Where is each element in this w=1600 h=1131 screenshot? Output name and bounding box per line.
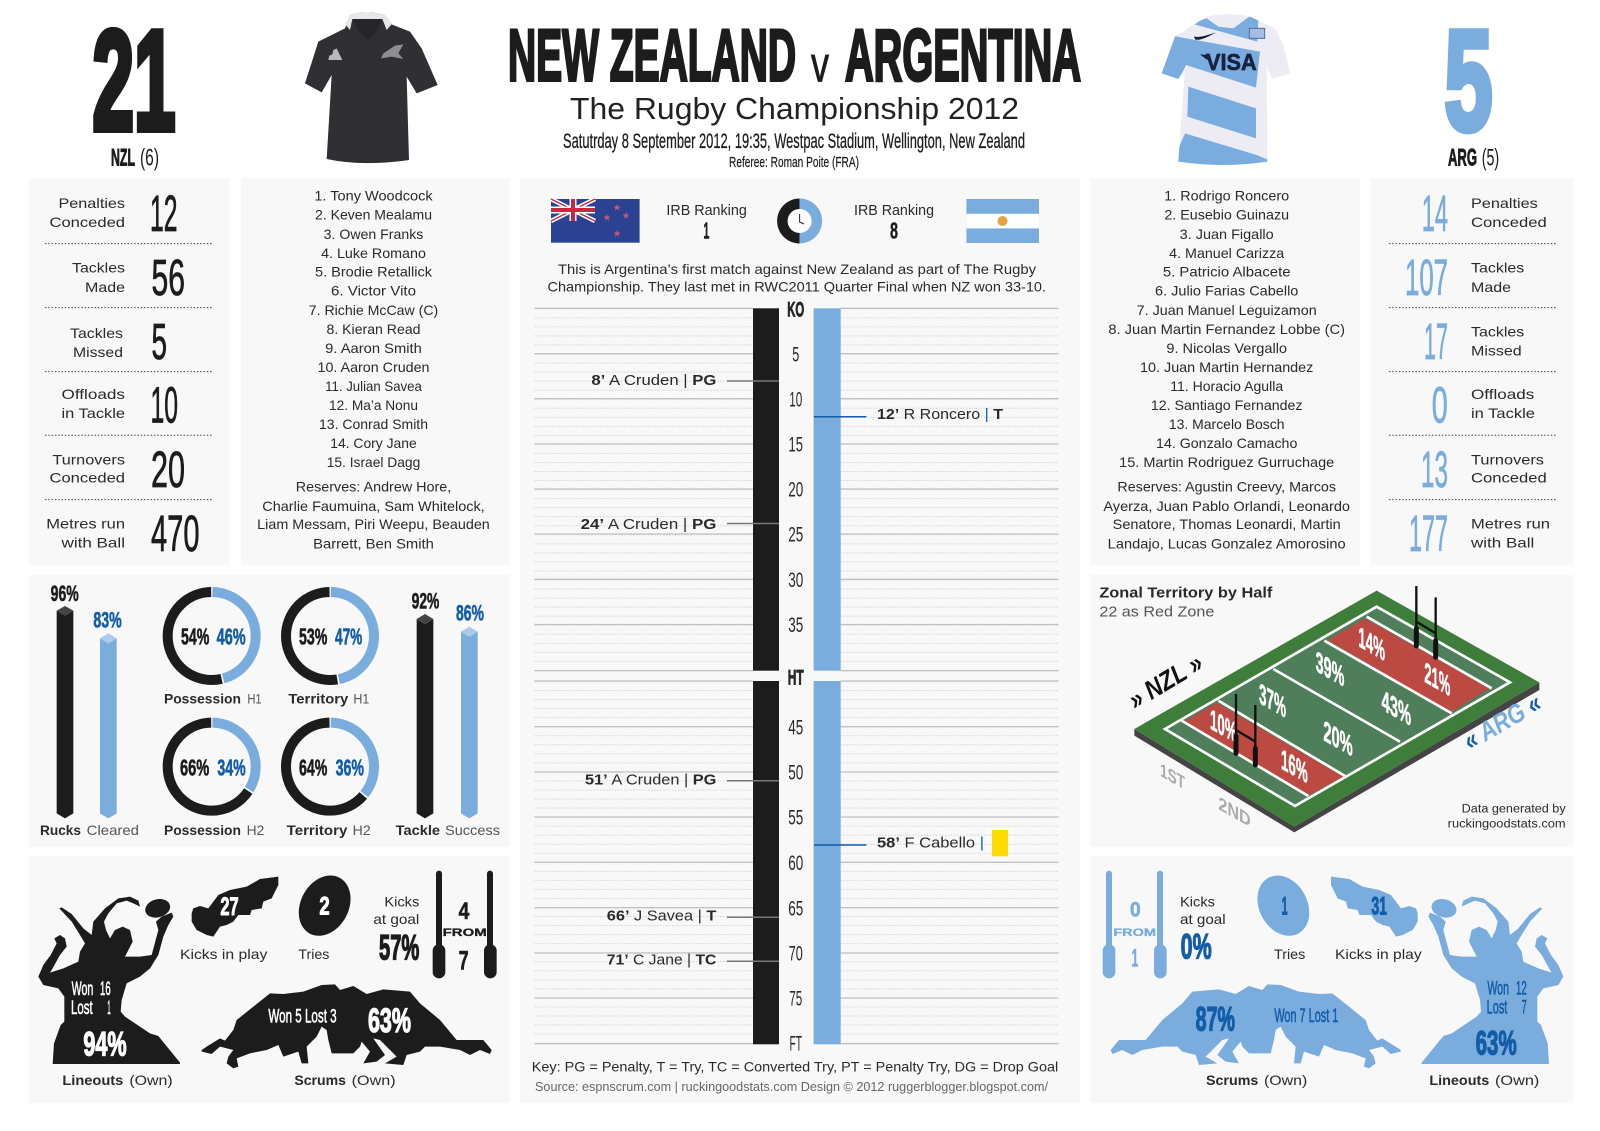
- panel: ARG team list: 11. Horacio Agulla: [1170, 378, 1283, 394]
- stat: tackles made: Tackles: [72, 260, 125, 276]
- zone percentages: 43%: [1382, 683, 1411, 733]
- panel: zonal territory: [1090, 575, 1573, 847]
- icon: NZL ball with tries: [289, 866, 361, 962]
- donut: territory H1: 47%: [335, 624, 362, 650]
- bar: ARG second half: [814, 681, 841, 1044]
- icon: goalpost pads near end: [1236, 736, 1255, 765]
- icon: half-and-half clock: [777, 198, 822, 244]
- icon: goalposts near end: [1236, 694, 1255, 767]
- data credit: [1448, 802, 1566, 831]
- icon: New Zealand flag: [551, 199, 640, 243]
- panel: NZL team list: 12. Ma’a Nonu: [329, 397, 418, 413]
- match details: [563, 130, 1025, 171]
- stat: ARG penalties conceded: [1422, 185, 1547, 242]
- panel: ARG team list: 3. Juan Figallo: [1180, 226, 1274, 242]
- icon: NZL goalposts 4 from 7: 7: [459, 945, 469, 975]
- caption: ARG scrums own: Scrums: [1206, 1072, 1259, 1088]
- event: 58 min yellow card: 58’ F Cabello |: [877, 835, 984, 852]
- label: second half: 2ND: [1218, 793, 1251, 832]
- minute scale: HT: [788, 666, 804, 689]
- panel: ARG team list: 14. Gonzalo Camacho: [1156, 435, 1298, 451]
- stat: ARG turnovers conceded: [1421, 441, 1547, 498]
- stat: tackles missed: Tackles: [70, 325, 123, 341]
- intro text: This is Argentina’s first match against New Zealand as part of The Rugby: [558, 261, 1036, 277]
- icon: ARG lineout silhouette: 12: [1516, 978, 1527, 999]
- stat: ARG tackles missed: [1424, 313, 1524, 370]
- title: ARGENTINA: [845, 16, 1081, 96]
- match details: Referee: Roman Poite (FRA): [729, 154, 859, 171]
- icon: NZL ball with tries: 2: [319, 893, 330, 921]
- stat: ARG penalties conceded: Penalties: [1471, 195, 1538, 211]
- caption: tackle success: Success: [445, 822, 500, 838]
- icon: NZL lineout silhouette: Won: [72, 979, 93, 1000]
- stat: offloads in tackle: Offloads: [62, 386, 125, 402]
- stat: metres run with ball: with Ball: [60, 534, 125, 550]
- caption: scrums own: Scrums: [294, 1072, 346, 1088]
- NZL IRB ranking: IRB Ranking: [666, 203, 747, 219]
- panel: NZL team list: 3. Owen Franks: [324, 226, 423, 242]
- panel: NZL team list: Reserves: Andrew Hore,: [296, 479, 451, 495]
- ARG final score: (5): [1482, 144, 1499, 172]
- caption: lineouts own: [62, 1072, 173, 1088]
- bar: NZL first half: [753, 308, 779, 671]
- icon: NZL ball with tries: Tries: [298, 946, 329, 962]
- icon: ARG goalposts 0 from 1: 0: [1130, 898, 1141, 922]
- stat: penalties conceded: [50, 185, 178, 242]
- donut: territory H2: 36%: [336, 754, 364, 780]
- stat: ARG offloads in tackle: [1432, 376, 1535, 434]
- key: Key: PG = Penalty, T = Try, TC = Converted Try, PT = Penalty Try, DG = Drop Goal: [532, 1059, 1058, 1075]
- NZL IRB ranking: 1: [703, 217, 709, 243]
- NZL final score: 21: [92, 2, 176, 160]
- stat: tackles missed: Missed: [73, 344, 123, 360]
- icon: ARG ball with tries: 1: [1282, 893, 1288, 921]
- panel: NZL team list: 2. Keven Mealamu: [315, 207, 432, 223]
- panel: NZL team list: 13. Conrad Smith: [319, 416, 428, 432]
- stat: tackles missed: [70, 313, 167, 370]
- minute scale: KO: [787, 299, 804, 322]
- heading: zonal territory by half: 22 as Red Zone: [1099, 605, 1214, 621]
- icon: NZL goalposts 4 from 7: [433, 871, 497, 978]
- charts: bars and donuts: [40, 581, 500, 838]
- NZL kicks at goal text: Kicks: [384, 894, 419, 910]
- donut: territory H2: Territory: [287, 822, 348, 838]
- stat: ARG metres run with ball: with Ball: [1470, 534, 1534, 550]
- stat: ARG tackles missed: 17: [1424, 313, 1448, 370]
- minute scale: 50: [788, 762, 803, 785]
- panel: NZL team list: 5. Brodie Retallick: [315, 264, 433, 280]
- icon: goalposts far end: [1416, 586, 1436, 658]
- panel: NZL team list: 4. Luke Romano: [321, 245, 426, 261]
- minute scale: 55: [788, 807, 803, 830]
- icon: ARG boot with kicks in play: 31: [1371, 893, 1387, 921]
- NZL final score: NZL: [111, 144, 135, 172]
- donut: possession H1: H1: [247, 690, 262, 706]
- stat: turnovers conceded: 20: [151, 441, 185, 498]
- icon: NZL boot with kicks in play: [180, 877, 278, 962]
- caption: ARG lineouts own: Lineouts: [1429, 1072, 1490, 1088]
- ARG final score: [1444, 2, 1499, 172]
- caption: lineouts own: (Own): [129, 1072, 173, 1088]
- panel: NZL team list: 9. Aaron Smith: [325, 340, 422, 356]
- minute scale: 15: [788, 434, 803, 456]
- bar: rucks cleared NZL: [51, 581, 79, 818]
- panel: ARG team list: 5. Patricio Albacete: [1163, 264, 1291, 280]
- donut: territory H1: 53%: [299, 624, 327, 650]
- ARG kicks at goal text: Kicks: [1180, 894, 1215, 910]
- zone percentages: [1210, 620, 1450, 790]
- ARG kicks at goal text: at goal: [1180, 911, 1226, 927]
- stat: turnovers conceded: [50, 441, 185, 498]
- minute scale: FT: [789, 1033, 802, 1056]
- intro text: [548, 261, 1046, 295]
- stat: turnovers conceded: Turnovers: [52, 451, 125, 467]
- caption: lineouts own: Lineouts: [62, 1072, 124, 1088]
- icon: ARG goalposts 0 from 1: FROM: [1113, 927, 1156, 939]
- NZL final score: (6): [140, 144, 159, 172]
- stat: turnovers conceded: Conceded: [50, 470, 125, 486]
- bar: tackle success NZL: 92%: [412, 588, 439, 613]
- zone percentages: 10%: [1210, 702, 1237, 750]
- heading: zonal territory by half: [1099, 585, 1272, 621]
- panel: ARG team list: 9. Nicolas Vergallo: [1166, 340, 1287, 356]
- icon: ARG boot with kicks in play: [1331, 877, 1422, 962]
- panel: NZL team list: 14. Cory Jane: [330, 435, 417, 451]
- icon: ARG scrum silhouette: [1111, 984, 1401, 1068]
- icon: goalpost pads far end: [1416, 628, 1436, 657]
- icon: NZL black jersey: [305, 12, 438, 163]
- stat: metres run with ball: 470: [151, 505, 200, 562]
- donut: possession H1: 46%: [217, 624, 246, 650]
- bar: tackle success NZL: [412, 588, 439, 818]
- stat: ARG turnovers conceded: 13: [1421, 441, 1448, 498]
- panel: ARG team list: 1. Rodrigo Roncero: [1164, 188, 1289, 204]
- panel: match timeline: [520, 178, 1080, 1103]
- minute scale: 20: [788, 479, 803, 502]
- zone percentages: 39%: [1316, 645, 1344, 693]
- icon: ARG lineout silhouette: Lost: [1487, 997, 1508, 1018]
- label: first half: 1ST: [1160, 760, 1185, 795]
- stat: ARG metres run with ball: Metres run: [1471, 515, 1550, 531]
- NZL kicks at goal text: [373, 894, 419, 967]
- label: NZL attacking direction: » NZL »: [1123, 647, 1208, 715]
- ARG final score: ARG: [1448, 144, 1477, 172]
- icon: NZL lineout silhouette: 94%: [83, 1025, 127, 1063]
- panel: ARG team list: Senatore, Thomas Leonardi, Martin: [1113, 516, 1341, 532]
- icon: NZL lineout silhouette: Lost: [71, 998, 93, 1019]
- ARG final score: 5: [1444, 2, 1492, 160]
- event: 71 min converted try: 71’ C Jane | TC: [607, 951, 717, 968]
- minute scale: 35: [788, 614, 803, 637]
- bar: rucks cleared NZL: 96%: [51, 581, 79, 606]
- caption: scrums own: (Own): [352, 1072, 396, 1088]
- caption: scrums own: [294, 1072, 396, 1088]
- stat: tackles made: 56: [152, 249, 185, 306]
- caption: rucks cleared: [40, 822, 139, 838]
- panel: ARG team list: Reserves: Agustin Creevy, Marcos: [1117, 479, 1336, 495]
- panel: ARG team list: 2. Eusebio Guinazu: [1164, 207, 1289, 223]
- panel: ARG team list: 6. Julio Farias Cabello: [1155, 283, 1299, 299]
- minute scale: 25: [788, 524, 803, 547]
- stat: ARG tackles made: 107: [1405, 249, 1448, 306]
- stat: offloads in tackle: [62, 376, 178, 434]
- icon: ARG scrum silhouette: Won 7 Lost 1: [1274, 1006, 1338, 1027]
- source: Source: espnscrum.com | ruckingoodstats.com Design © 2012 ruggerblogger.blogspot.com/: [535, 1080, 1049, 1094]
- panel: NZL team list: 8. Kieran Read: [326, 321, 420, 337]
- icon: ARG lineout silhouette: Won: [1487, 978, 1509, 999]
- stat: tackles made: Made: [85, 279, 125, 295]
- panel: ARG team list: Landajo, Lucas Gonzalez Amorosino: [1108, 535, 1346, 551]
- caption: ARG scrums own: (Own): [1264, 1072, 1307, 1088]
- minute scale: 75: [789, 988, 802, 1011]
- zonal territory graphic: [1099, 585, 1566, 832]
- icon: ARG scrum silhouette: 87%: [1196, 1001, 1235, 1039]
- panel: NZL team list: 7. Richie McCaw (C): [309, 302, 438, 318]
- donut: territory H2: 64%: [299, 754, 327, 780]
- donut: possession H2: H2: [247, 822, 265, 838]
- icon: NZL scrum silhouette: 63%: [368, 1002, 411, 1040]
- title: v: [811, 37, 829, 93]
- stat: ARG offloads in tackle: 0: [1432, 376, 1448, 434]
- panel: NZL team list: 10. Aaron Cruden: [318, 359, 430, 375]
- panel: NZL team list: Liam Messam, Piri Weepu, Beauden: [257, 516, 490, 532]
- heading: zonal territory by half: Zonal Territory by Half: [1099, 585, 1272, 601]
- data credit: Data generated by: [1462, 802, 1566, 816]
- icon: NZL lineout silhouette: 16: [100, 979, 111, 1000]
- panel: NZL team list: 11. Julian Savea: [325, 378, 422, 394]
- stat: ARG turnovers conceded: Conceded: [1471, 470, 1547, 486]
- ARG set piece graphics: [1103, 866, 1563, 1088]
- panel: ARG team list: 13. Marcelo Bosch: [1169, 416, 1285, 432]
- icon: ARG ball with tries: Tries: [1274, 946, 1305, 962]
- panel: ARG team list: Ayerza, Juan Pablo Orlandi, Leonardo: [1103, 498, 1350, 514]
- event: 24 min penalty: 24’ A Cruden | PG: [581, 516, 716, 533]
- donut: territory H2: [286, 723, 374, 838]
- stat: metres run with ball: [46, 505, 199, 562]
- pitch: 21%: [1424, 656, 1450, 703]
- icon: NZL boot with kicks in play: 27: [220, 893, 239, 921]
- caption: ARG scrums own: [1206, 1072, 1307, 1088]
- icon: NZL scrum silhouette: [202, 984, 492, 1068]
- NZL IRB ranking: [666, 203, 747, 243]
- stat: ARG offloads in tackle: Offloads: [1471, 386, 1534, 402]
- panel: ARG team list: 10. Juan Martin Hernandez: [1140, 359, 1313, 375]
- minute scale: 10: [789, 388, 802, 411]
- stat: penalties conceded: Conceded: [50, 214, 125, 230]
- subtitle: The Rugby Championship 2012: [570, 91, 1019, 126]
- stat: ARG penalties conceded: 14: [1422, 185, 1448, 242]
- caption: tackle success: [396, 822, 500, 838]
- minute scale: 70: [789, 943, 803, 966]
- event: 8 min penalty: 8’ A Cruden | PG: [591, 372, 716, 389]
- title: NEW ZEALAND: [508, 16, 796, 96]
- panel: NZL team list: Charlie Faumuina, Sam Whitelock,: [262, 498, 485, 514]
- donut: possession H2: [164, 723, 265, 838]
- panel: NZL team list: [241, 178, 510, 565]
- stat: ARG tackles missed: Tackles: [1471, 323, 1524, 339]
- ARG IRB ranking: 8: [890, 217, 898, 243]
- minute scale: 45: [788, 716, 803, 739]
- panel: NZL match stats: 12: [150, 185, 178, 242]
- zone percentages: 37%: [1259, 677, 1286, 725]
- bar: ARG first half: [814, 308, 841, 671]
- icon: ARG lineout silhouette: 7: [1522, 997, 1527, 1018]
- icon: NZL goalposts 4 from 7: FROM: [443, 927, 487, 939]
- event: 66 min try: 66’ J Savea | T: [607, 908, 716, 925]
- icon: NZL lineout silhouette: [38, 896, 180, 1064]
- icon: ARG striped jersey: [1158, 14, 1290, 168]
- icon: NZL lineout silhouette: 1: [107, 998, 111, 1019]
- panel: NZL match stats: [28, 178, 229, 565]
- panel: ARG team list: 7. Juan Manuel Leguizamon: [1137, 302, 1317, 318]
- ARG kicks at goal text: [1180, 894, 1226, 967]
- stat: offloads in tackle: in Tackle: [62, 405, 125, 421]
- panel: ARG team list: 8. Juan Martin Fernandez Lobbe (C): [1108, 321, 1345, 337]
- icon: ARG goalposts 0 from 1: 1: [1132, 946, 1138, 973]
- donut: territory H1: [286, 592, 374, 706]
- NZL kicks at goal text: at goal: [373, 911, 419, 927]
- icon: NZL scrum silhouette: Won 5 Lost 3: [268, 1007, 337, 1028]
- ARG kicks at goal text: 0%: [1181, 928, 1212, 967]
- stat: ARG tackles made: Tackles: [1471, 260, 1524, 276]
- match details: Satutrday 8 September 2012, 19:35, Westpac Stadium, Wellington, New Zealand: [563, 130, 1025, 153]
- donut: possession H1: [164, 592, 262, 706]
- NZL kicks at goal text: 57%: [379, 928, 419, 967]
- donut: territory H2: H2: [353, 822, 371, 838]
- donut: possession H1: Possession: [164, 690, 241, 706]
- icon: ARG ball with tries: [1247, 866, 1319, 962]
- panel: ARG team list: [1090, 178, 1360, 565]
- donut: possession H2: 34%: [217, 754, 246, 780]
- panel: possession and percentages: [28, 575, 510, 847]
- minute scale: 5: [792, 344, 799, 366]
- pitch: [1134, 586, 1539, 832]
- panel: NZL match stats: 10: [150, 376, 178, 434]
- panel: ARG team list: 12. Santiago Fernandez: [1151, 397, 1303, 413]
- stat: metres run with ball: Metres run: [46, 515, 125, 531]
- stat: ARG offloads in tackle: in Tackle: [1471, 405, 1535, 421]
- icon: ARG lineout silhouette: [1422, 896, 1563, 1064]
- stat: ARG penalties conceded: Conceded: [1471, 214, 1547, 230]
- ARG IRB ranking: IRB Ranking: [854, 203, 934, 219]
- stat: tackles made: [72, 249, 185, 306]
- stat: penalties conceded: Penalties: [58, 195, 125, 211]
- panel: NZL team list: 6. Victor Vito: [331, 283, 416, 299]
- panel: ARG team list: 15. Martin Rodriguez Gurruchage: [1119, 454, 1334, 470]
- icon: NZL goalposts 4 from 7: 4: [459, 898, 470, 925]
- donut: territory H1: Territory: [288, 690, 349, 706]
- icon: NZL boot with kicks in play: Kicks in play: [180, 946, 267, 962]
- event: 58 min yellow card: [814, 830, 1008, 856]
- panel: ARG match stats: [1371, 178, 1573, 565]
- bar: rucks cleared ARG: 83%: [93, 607, 122, 632]
- stat: tackles missed: 5: [152, 313, 167, 370]
- icon: ARG lineout silhouette: 63%: [1476, 1025, 1517, 1063]
- event: 51 min penalty: 51’ A Cruden | PG: [585, 771, 716, 788]
- donut: possession H1: 54%: [181, 624, 209, 650]
- stat: ARG tackles missed: Missed: [1471, 342, 1522, 358]
- donut: possession H2: Possession: [164, 822, 241, 838]
- icon: ARG goalposts 0 from 1: [1103, 871, 1167, 978]
- caption: ARG lineouts own: (Own): [1495, 1072, 1539, 1088]
- donut: territory H1: H1: [353, 690, 370, 706]
- event: 12 min try: 12’ R Roncero | T: [877, 406, 1003, 423]
- NZL set piece graphics: [38, 866, 497, 1088]
- bar: rucks cleared ARG: [93, 607, 122, 818]
- stat: ARG metres run with ball: 177: [1409, 505, 1448, 562]
- minute scale: 30: [788, 569, 803, 592]
- panel: ARG team list: 4. Manuel Carizza: [1169, 245, 1284, 261]
- data credit: ruckingoodstats.com: [1448, 817, 1566, 831]
- label: ARG attacking direction: « ARG «: [1458, 687, 1547, 756]
- bar: tackle success ARG: [456, 601, 484, 818]
- caption: rucks cleared: Rucks: [40, 822, 81, 838]
- stat: ARG metres run with ball: [1409, 505, 1550, 562]
- panel: NZL team list: 15. Israel Dagg: [327, 454, 420, 470]
- donut: possession H2: 66%: [180, 754, 209, 780]
- bar: tackle success ARG: 86%: [456, 601, 484, 626]
- panel: ARG set piece: [1090, 856, 1573, 1103]
- zone percentages: 14%: [1358, 620, 1385, 668]
- panel: NZL team list: Barrett, Ben Smith: [313, 535, 434, 551]
- minute scale: 60: [788, 852, 803, 875]
- caption: ARG lineouts own: [1429, 1072, 1539, 1088]
- minute scale: [787, 299, 804, 1056]
- panel: NZL team list: 1. Tony Woodcock: [314, 188, 434, 204]
- panel: NZL set piece: [28, 856, 510, 1103]
- zone percentages: 20%: [1323, 714, 1353, 763]
- zone percentages: 16%: [1281, 742, 1308, 790]
- caption: rucks cleared: Cleared: [87, 822, 139, 838]
- icon: Argentina flag: [966, 199, 1039, 243]
- chart: scoring timeline: [534, 299, 1059, 1056]
- intro text: Championship. They last met in RWC2011 Quarter Final when NZ won 33-10.: [548, 279, 1046, 295]
- caption: tackle success: Tackle: [396, 822, 440, 838]
- ARG IRB ranking: [854, 203, 934, 243]
- minute scale: 65: [788, 897, 803, 920]
- stat: ARG tackles made: Made: [1471, 279, 1511, 295]
- stat: ARG turnovers conceded: Turnovers: [1471, 451, 1544, 467]
- icon: ARG striped jersey: VISA: [1206, 49, 1257, 75]
- bar: NZL second half: [753, 681, 779, 1044]
- icon: ARG boot with kicks in play: Kicks in play: [1335, 946, 1422, 962]
- NZL final score: [92, 2, 176, 172]
